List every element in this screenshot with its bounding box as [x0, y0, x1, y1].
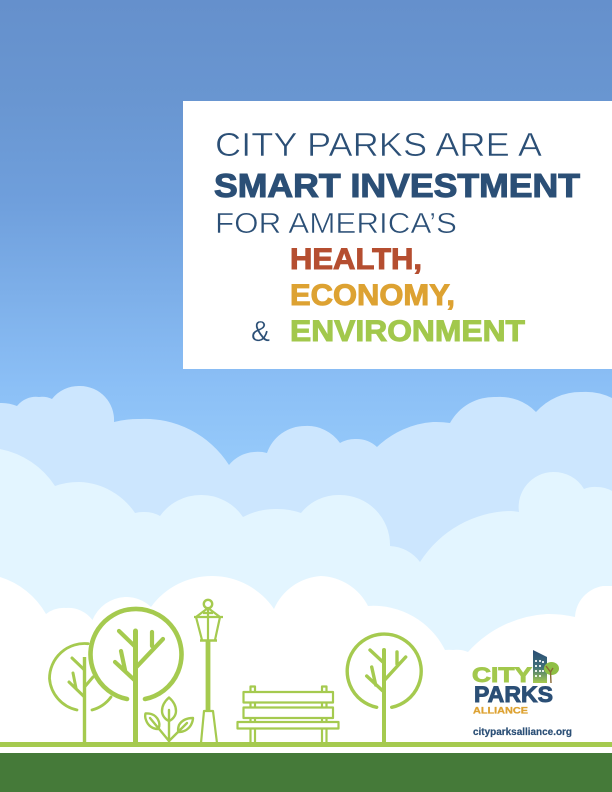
- ampersand: &: [251, 316, 270, 348]
- website url: cityparksalliance.org: [473, 727, 572, 738]
- middle cloud layer: [0, 449, 612, 792]
- ground band: [0, 753, 612, 792]
- right tree: [347, 634, 421, 744]
- keyword: environment: ENVIRONMENT: [290, 315, 525, 348]
- front white cloud layer: [0, 576, 612, 792]
- keyword: economy: ECONOMY,: [290, 279, 455, 312]
- logo tree icon: [544, 662, 559, 683]
- logo building icon: [533, 650, 547, 683]
- heading line: for america's: FOR AMERICA’S: [215, 208, 457, 240]
- sprout plant: [145, 698, 193, 742]
- logo word: alliance: ALLIANCE: [473, 706, 528, 716]
- logo: city parks alliance: [472, 650, 572, 738]
- logo word: parks: PARKS: [474, 682, 553, 707]
- park bench: [238, 686, 338, 742]
- logo word: city: CITY: [472, 664, 532, 687]
- keyword: health: HEALTH,: [290, 243, 422, 276]
- large tree: [91, 609, 182, 744]
- ground line: [0, 742, 612, 747]
- street lamp: [194, 600, 223, 743]
- title panel: [183, 101, 612, 369]
- back cloud layer: [0, 386, 612, 792]
- heading line: city parks are a: CITY PARKS ARE A: [215, 126, 542, 163]
- heading line: smart investment: SMART INVESTMENT: [214, 167, 580, 204]
- small left tree: [50, 644, 111, 744]
